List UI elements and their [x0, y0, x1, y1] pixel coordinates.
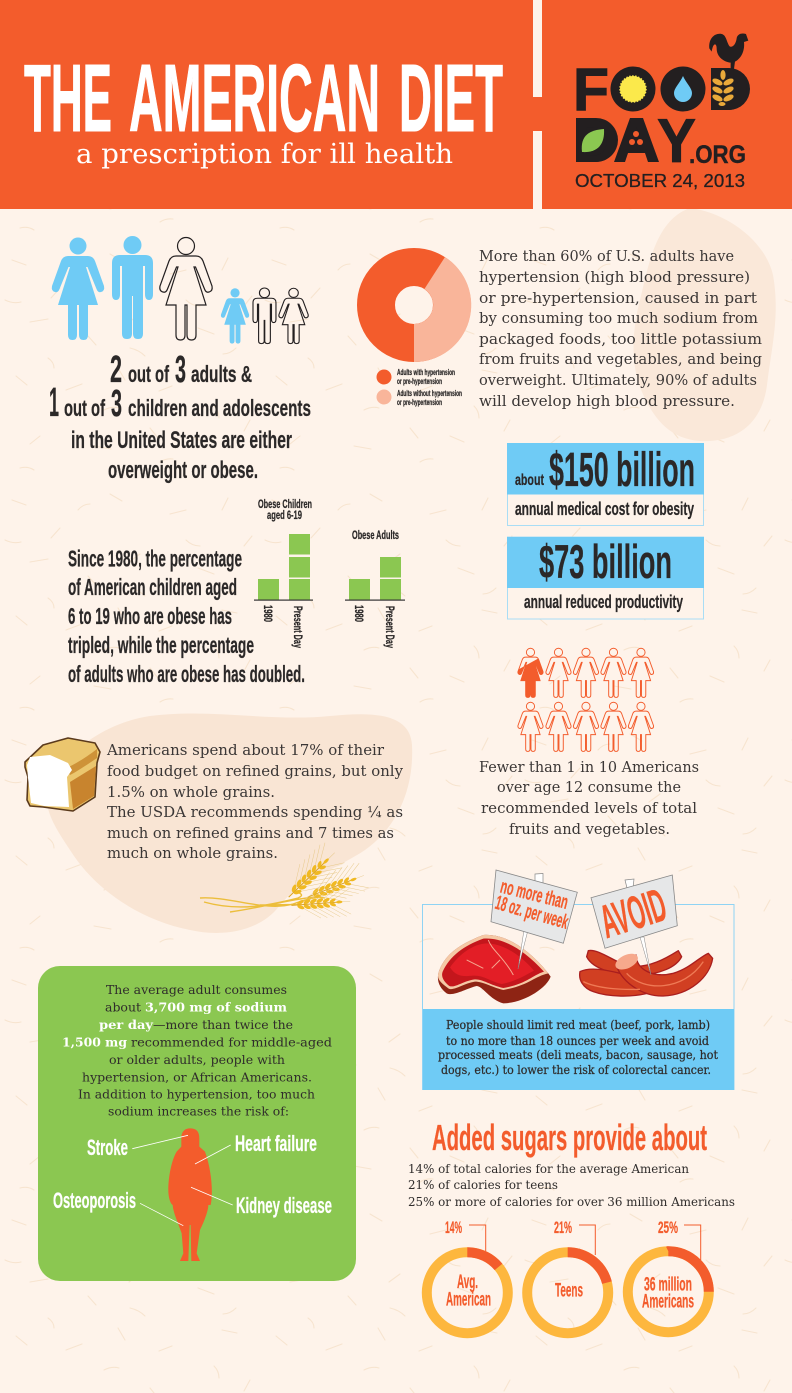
text block: hypertension: from fruits and vegetables, and being — [479, 352, 762, 368]
text block: grains: much on whole grains. — [107, 846, 278, 862]
donut: 25 percent: Americans — [642, 1292, 694, 1313]
donut: 14 percent — [427, 1218, 508, 1333]
stat box: productivity: annual reduced productivity — [524, 591, 683, 612]
icon: blue man — [112, 236, 153, 339]
icon: outline girl — [279, 288, 308, 344]
bar chart: obese adults: Present Day — [383, 606, 397, 648]
icon: outline woman — [160, 238, 212, 340]
text block: hypertension: packaged foods, too little potassium — [479, 332, 762, 348]
icon: wheat — [200, 841, 369, 920]
bar chart: obese adults: Obese Adults — [352, 528, 399, 542]
logo letter A with seeds: A — [614, 108, 659, 175]
sodium text: The average adult consumes — [106, 982, 287, 997]
bar chart: obese children: 1980 — [261, 605, 275, 622]
statement: overweight or obese: adults & — [191, 361, 252, 387]
legend — [376, 368, 462, 407]
icon: blue girl — [221, 288, 249, 344]
text block: hypertension: or pre-hypertension, caused in part — [479, 291, 757, 307]
text: meat advice: dogs, etc.) to lower the risk of colorectal cancer. — [441, 1062, 711, 1077]
statement: overweight or obese: in the United States are either — [71, 427, 292, 454]
statement: overweight or obese: children and adolescents — [128, 395, 311, 421]
sodium text: sodium increases the risk of: — [108, 1104, 289, 1118]
donut: 21 percent: 21% — [554, 1218, 572, 1237]
header divider — [533, 0, 542, 209]
bar chart: obese adults: 1980 — [352, 605, 366, 622]
background blob: grains — [47, 713, 412, 933]
logo letter D with wheat: D — [709, 58, 749, 123]
text block: sugar stats — [408, 1161, 735, 1209]
text: meat advice — [438, 1017, 718, 1077]
logo letter Y: Y — [657, 107, 696, 176]
text block: hypertension: More than 60% of U.S. adults have — [479, 249, 734, 265]
text block: fruits and vegetables: fruits and vegetables. — [509, 822, 670, 838]
subtitle: a prescription for ill health — [76, 138, 453, 170]
sodium text — [62, 982, 332, 1118]
logo letter D with leaf: D — [574, 108, 618, 175]
legend: or pre-hypertension — [397, 398, 442, 407]
text block: obesity since 1980: tripled, while the percentage — [68, 632, 254, 658]
logo .ORG: .ORG — [689, 141, 746, 169]
risk labels: Kidney disease — [236, 1193, 332, 1218]
text block: sugar stats: 14% of total calories for the average American — [408, 1161, 689, 1176]
text block: obesity since 1980: of American children aged — [68, 574, 237, 600]
text block: hypertension: by consuming too much sodium from — [479, 311, 758, 327]
text block: grains: The USDA recommends spending ¼ as — [107, 805, 403, 821]
logo letter F: F — [573, 56, 609, 123]
title: THE — [24, 45, 112, 152]
text block: hypertension: hypertension (high blood pressure) — [479, 270, 750, 286]
text block: fruits and vegetables: Fewer than 1 in 10 Americans — [479, 760, 699, 776]
statement: overweight or obese: out of — [64, 395, 105, 421]
icon: sausages — [580, 950, 713, 996]
donut: 14 percent: 14% — [445, 1218, 462, 1237]
bar chart: obese adults — [345, 528, 405, 648]
donut: 21 percent: Teens — [555, 1281, 583, 1302]
stat box: medical cost — [507, 443, 704, 526]
icon: sign no more than 18 oz — [491, 870, 577, 969]
text: meat advice: processed meats (deli meats, bacon, sausage, hot — [438, 1047, 718, 1062]
statement: overweight or obese: 2 — [110, 349, 122, 391]
sodium text: recommended for middle-aged — [131, 1034, 332, 1050]
risk labels: Heart failure — [235, 1131, 317, 1156]
text block: fruits and vegetables: recommended levels of total — [481, 801, 697, 817]
statement: overweight or obese: out of — [128, 361, 169, 387]
sodium text: 1,500 mg — [62, 1034, 127, 1050]
legend: Adults with hypertension — [397, 368, 455, 377]
risk labels: Osteoporosis — [53, 1188, 136, 1213]
text block: grains: food budget on refined grains, but only — [107, 764, 404, 780]
donut chart: hypertension — [376, 257, 471, 407]
statement: overweight or obese: 3 — [175, 349, 186, 391]
statement: overweight or obese — [49, 349, 311, 484]
bar chart: obese children: aged 6-19 — [267, 508, 302, 522]
icon: rooster — [709, 34, 748, 69]
header band — [0, 0, 792, 209]
event date: OCTOBER 24, 2013 — [575, 171, 745, 191]
text block: sugar stats: 25% or more of calories for over 36 million Americans — [408, 1194, 735, 1209]
panel: red and processed meat — [422, 870, 734, 1090]
risk labels — [53, 1131, 332, 1226]
statement: overweight or obese: 3 — [111, 383, 122, 425]
header band: DIET — [399, 45, 503, 152]
donut: 25 percent: 36 million — [644, 1275, 692, 1296]
sodium text: In addition to hypertension, too much — [78, 1086, 315, 1102]
text: meat advice: People should limit red meat (beef, pork, lamb) — [446, 1017, 710, 1032]
text block: grains — [106, 743, 404, 862]
sodium text: —more than twice the — [153, 1017, 293, 1032]
pictogram: adults and children — [52, 236, 308, 344]
stat box: productivity — [507, 535, 704, 619]
pictogram: 1 in 10 — [518, 648, 654, 751]
text block: grains: Americans spend about 17% of their — [106, 743, 384, 759]
statement: overweight or obese: overweight or obese. — [108, 457, 258, 484]
icon: water drop in O — [660, 66, 706, 112]
stat box: productivity: $73 billion — [539, 535, 672, 588]
text block: grains: 1.5% on whole grains. — [107, 785, 275, 801]
bar chart: obese children — [254, 497, 313, 648]
icon: steak — [438, 935, 551, 1003]
donut: 25 percent — [628, 1218, 709, 1332]
donut: 14 percent: Avg. — [457, 1272, 478, 1293]
icon: sign no more than 18 oz: no more than — [498, 876, 570, 914]
bar chart: obese children: Present Day — [291, 606, 305, 648]
sodium text: or older adults, people with — [109, 1052, 285, 1067]
bar chart: obese children: Obese Children — [258, 497, 312, 511]
title: AMERICAN — [129, 45, 380, 152]
background blob: upper right — [634, 208, 776, 441]
donut: 25 percent: 25% — [658, 1218, 678, 1237]
icon: bread loaf — [25, 738, 100, 811]
text block: fruits and vegetables: over age 12 consume the — [497, 780, 681, 796]
text block: hypertension: will develop high blood pressure. — [479, 394, 735, 410]
title — [24, 45, 503, 152]
stat box: medical cost: about — [515, 472, 544, 489]
risk labels: Stroke — [87, 1135, 128, 1160]
legend: Adults without hypertension — [397, 389, 462, 398]
text block: obesity since 1980: Since 1980, the percentage — [68, 546, 242, 572]
panel: sodium — [38, 966, 356, 1281]
text block: fruits and vegetables — [479, 760, 699, 838]
text block: obesity since 1980 — [68, 546, 305, 687]
icon: body silhouette — [168, 1128, 212, 1261]
Food Day logo — [573, 34, 750, 191]
icon: outline boy — [253, 288, 276, 344]
text block: hypertension — [479, 249, 762, 410]
icon: sun in O — [610, 66, 656, 112]
sodium text: per day — [99, 1017, 154, 1032]
stat box: medical cost: annual medical cost for obesity — [515, 498, 694, 519]
text: meat advice: to no more than 18 ounces per week and avoid — [446, 1033, 709, 1048]
donut: 21 percent — [527, 1218, 608, 1333]
statement: overweight or obese: 1 — [49, 379, 59, 425]
icon: sign no more than 18 oz: 18 oz. per week — [493, 892, 571, 934]
icon: blue woman — [52, 238, 104, 340]
text block: obesity since 1980: 6 to 19 who are obese has — [68, 603, 232, 629]
text block: sugar stats: 21% of calories for teens — [408, 1177, 558, 1192]
icon: sign avoid: AVOID — [594, 878, 672, 948]
legend: or pre-hypertension — [397, 377, 442, 386]
text block: hypertension: overweight. Ultimately, 90% of adults — [479, 373, 757, 389]
text block: grains: much on refined grains and 7 times as — [107, 826, 394, 842]
sodium text: hypertension, or African Americans. — [82, 1070, 312, 1084]
sodium text: about — [105, 1000, 141, 1014]
icon: sign avoid — [591, 875, 677, 975]
sodium text: 3,700 mg of sodium — [145, 1000, 287, 1014]
text block: obesity since 1980: of adults who are obese has doubled. — [68, 661, 305, 687]
donut: 14 percent: American — [446, 1290, 491, 1311]
